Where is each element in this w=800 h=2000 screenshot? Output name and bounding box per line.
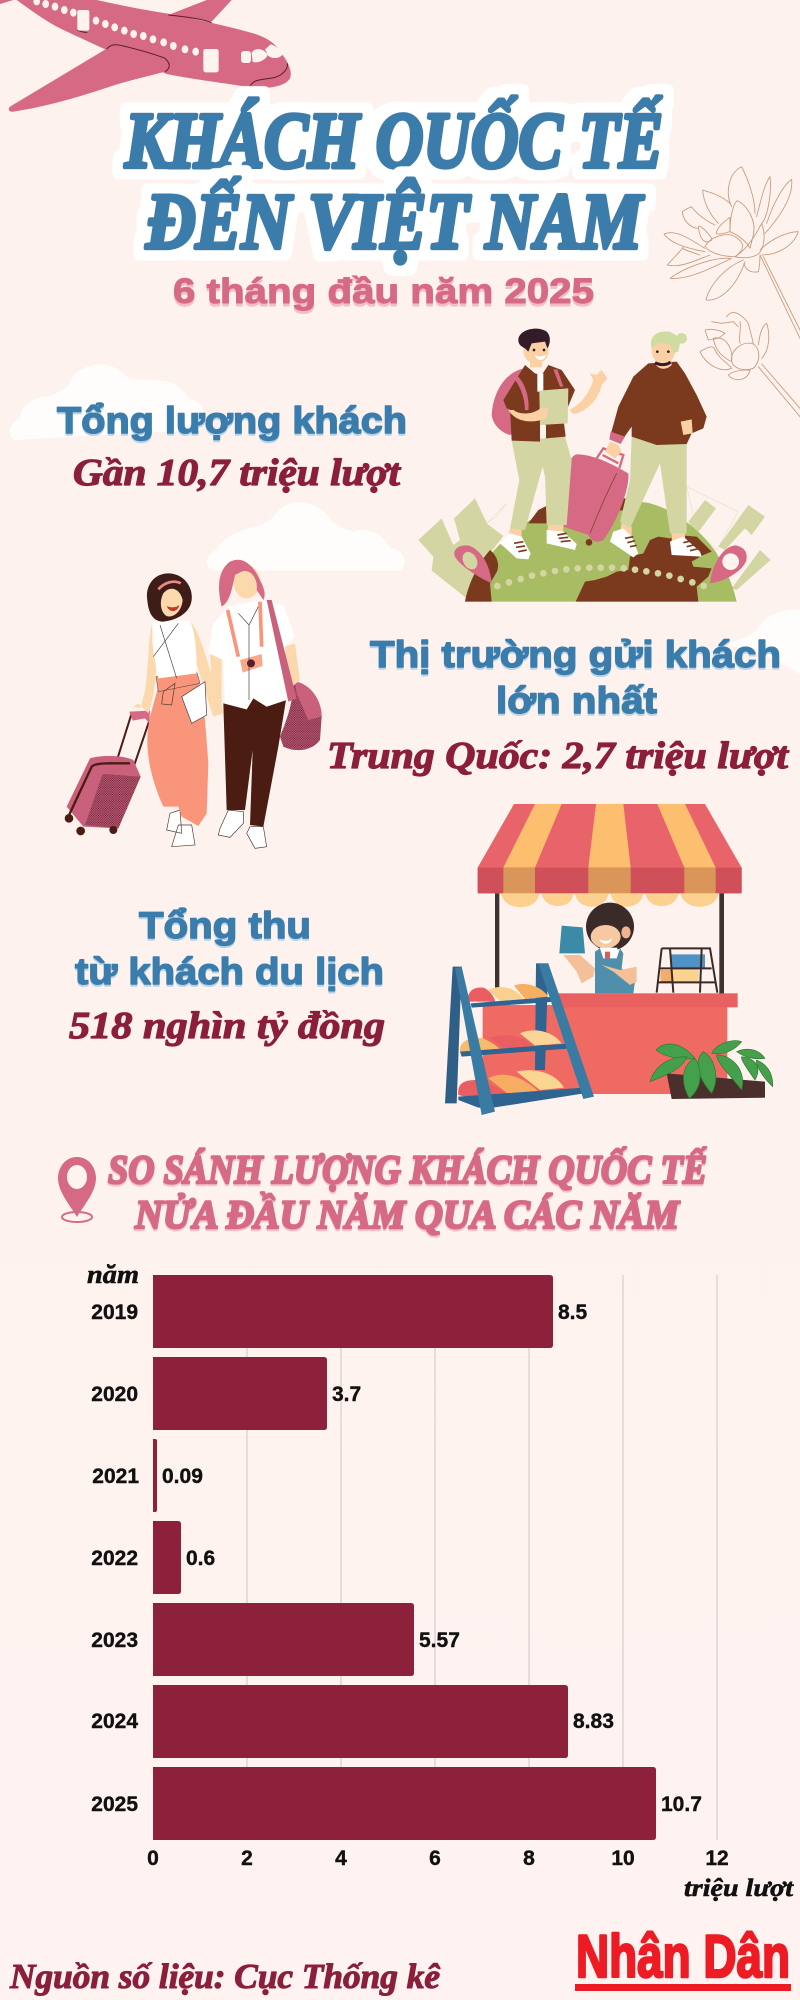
axis labels: 10 [611, 1847, 635, 1870]
icon: airplane [0, 0, 291, 112]
heading: top source market: Thị trường gửi khách [370, 634, 781, 675]
heading: revenue: Tổng thu [139, 905, 311, 946]
axis title: million visits: triệu lượt [684, 1875, 794, 1902]
bars [153, 1275, 656, 1840]
illustration: two women travellers [65, 560, 322, 848]
axis labels: 0 [147, 1847, 159, 1870]
illustration: travellers on globe [418, 329, 771, 602]
grid lines [247, 1275, 717, 1840]
axis labels [147, 1847, 729, 1870]
value labels: 0.6 [186, 1547, 215, 1570]
buildings [418, 498, 771, 598]
display rack [657, 948, 717, 993]
axis labels: 4 [335, 1847, 347, 1870]
panel: top source market [327, 634, 790, 777]
year labels: 2022 [91, 1547, 138, 1570]
main title: KHÁCH QUỐC TẾ [124, 97, 663, 185]
bag [280, 682, 322, 750]
counter [483, 1005, 727, 1094]
year labels: 2025 [91, 1793, 138, 1816]
illustration: market stall [445, 804, 773, 1115]
source note: Nguồn số liệu: Cục Thống kê [9, 1957, 440, 1996]
year labels: 2024 [91, 1710, 138, 1733]
chart heading [108, 1147, 707, 1237]
value labels: 0.09 [162, 1465, 203, 1488]
shopkeeper [559, 903, 637, 993]
awning [478, 804, 742, 893]
axis labels: 2 [241, 1847, 253, 1870]
panel: total tourism revenue: từ khách du lịch [75, 951, 384, 992]
year labels: 2020 [91, 1383, 138, 1406]
shelf with goods [445, 963, 594, 1115]
icon: lotus flowers [664, 167, 800, 417]
heading: total visitors: Tổng lượng khách [57, 400, 407, 441]
woman left [133, 573, 223, 847]
location pins [454, 545, 492, 583]
axis labels: 6 [429, 1847, 441, 1870]
panel: total visitors [57, 400, 407, 494]
axis labels: 12 [705, 1847, 729, 1870]
clouds behind text [10, 364, 405, 571]
woman [605, 331, 707, 557]
year labels [91, 1301, 139, 1816]
year labels: 2021 [92, 1465, 139, 1488]
value labels: 5.57 [419, 1629, 460, 1652]
cloud right edge [724, 610, 800, 675]
value labels: 8.5 [558, 1301, 588, 1324]
plant [650, 1041, 773, 1099]
scallops [501, 894, 718, 907]
main title [124, 97, 663, 266]
suitcase [65, 711, 150, 835]
chart heading: NỬA ĐẦU NĂM QUA CÁC NĂM [134, 1192, 680, 1237]
bar chart [87, 1260, 794, 1902]
subtitle: 6 tháng đầu năm 2025 [173, 272, 594, 311]
value: revenue: 518 nghìn tỷ đồng [69, 1005, 385, 1047]
value labels: 3.7 [332, 1383, 361, 1406]
value labels [162, 1301, 702, 1816]
chart heading: SO SÁNH LƯỢNG KHÁCH QUỐC TẾ [108, 1147, 707, 1192]
value: China: Trung Quốc: 2,7 triệu lượt [327, 735, 790, 777]
man [492, 329, 607, 559]
value labels: 10.7 [661, 1793, 702, 1816]
value: total visitors: Gần 10,7 triệu lượt [73, 452, 402, 494]
panel: top source market: lớn nhất [496, 680, 657, 721]
globe [465, 501, 737, 602]
axis title: year: năm [87, 1260, 139, 1289]
icon: location pin [58, 1157, 96, 1222]
suitcase [597, 448, 623, 468]
axis labels: 8 [523, 1847, 535, 1870]
woman right [208, 560, 300, 848]
value labels: 8.83 [573, 1710, 614, 1733]
panel: total tourism revenue [69, 905, 385, 1047]
year labels: 2023 [91, 1629, 138, 1652]
main title: ĐẾN VIỆT NAM [145, 178, 644, 266]
year labels: 2019 [91, 1301, 138, 1324]
